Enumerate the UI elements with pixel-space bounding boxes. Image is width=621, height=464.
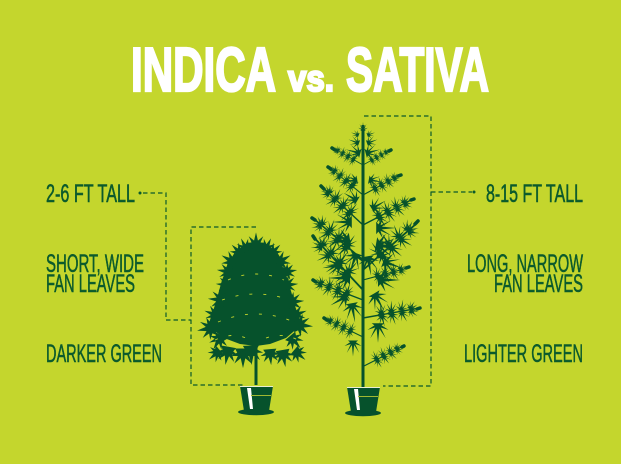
- indica canopy gaps: [215, 274, 298, 340]
- indica leaves label: FAN LEAVES: [46, 270, 135, 298]
- indica plant: [195, 232, 314, 385]
- title: vs.: [288, 58, 334, 99]
- indica leaves: [195, 232, 314, 369]
- indica height label: 2-6 FT TALL: [46, 180, 135, 208]
- sativa pot: [345, 387, 381, 416]
- title: [131, 36, 489, 105]
- indica pot: [238, 386, 274, 415]
- stem and canopy core: [254, 340, 258, 385]
- sativa leaves label: [467, 250, 583, 298]
- sativa leaves: [321, 122, 405, 357]
- title: INDICA: [131, 36, 276, 105]
- seed tips: [312, 148, 420, 347]
- indica leaves label: [46, 250, 144, 298]
- title: SATIVA: [346, 36, 489, 105]
- sativa plant: [301, 122, 429, 387]
- indica leaves label: SHORT, WIDE: [46, 250, 144, 278]
- sativa stem: [362, 125, 364, 387]
- sativa height bracket: [364, 116, 476, 386]
- indica height bracket: [138, 192, 256, 385]
- sativa fronds: [301, 141, 429, 375]
- indica color label: DARKER GREEN: [46, 340, 162, 368]
